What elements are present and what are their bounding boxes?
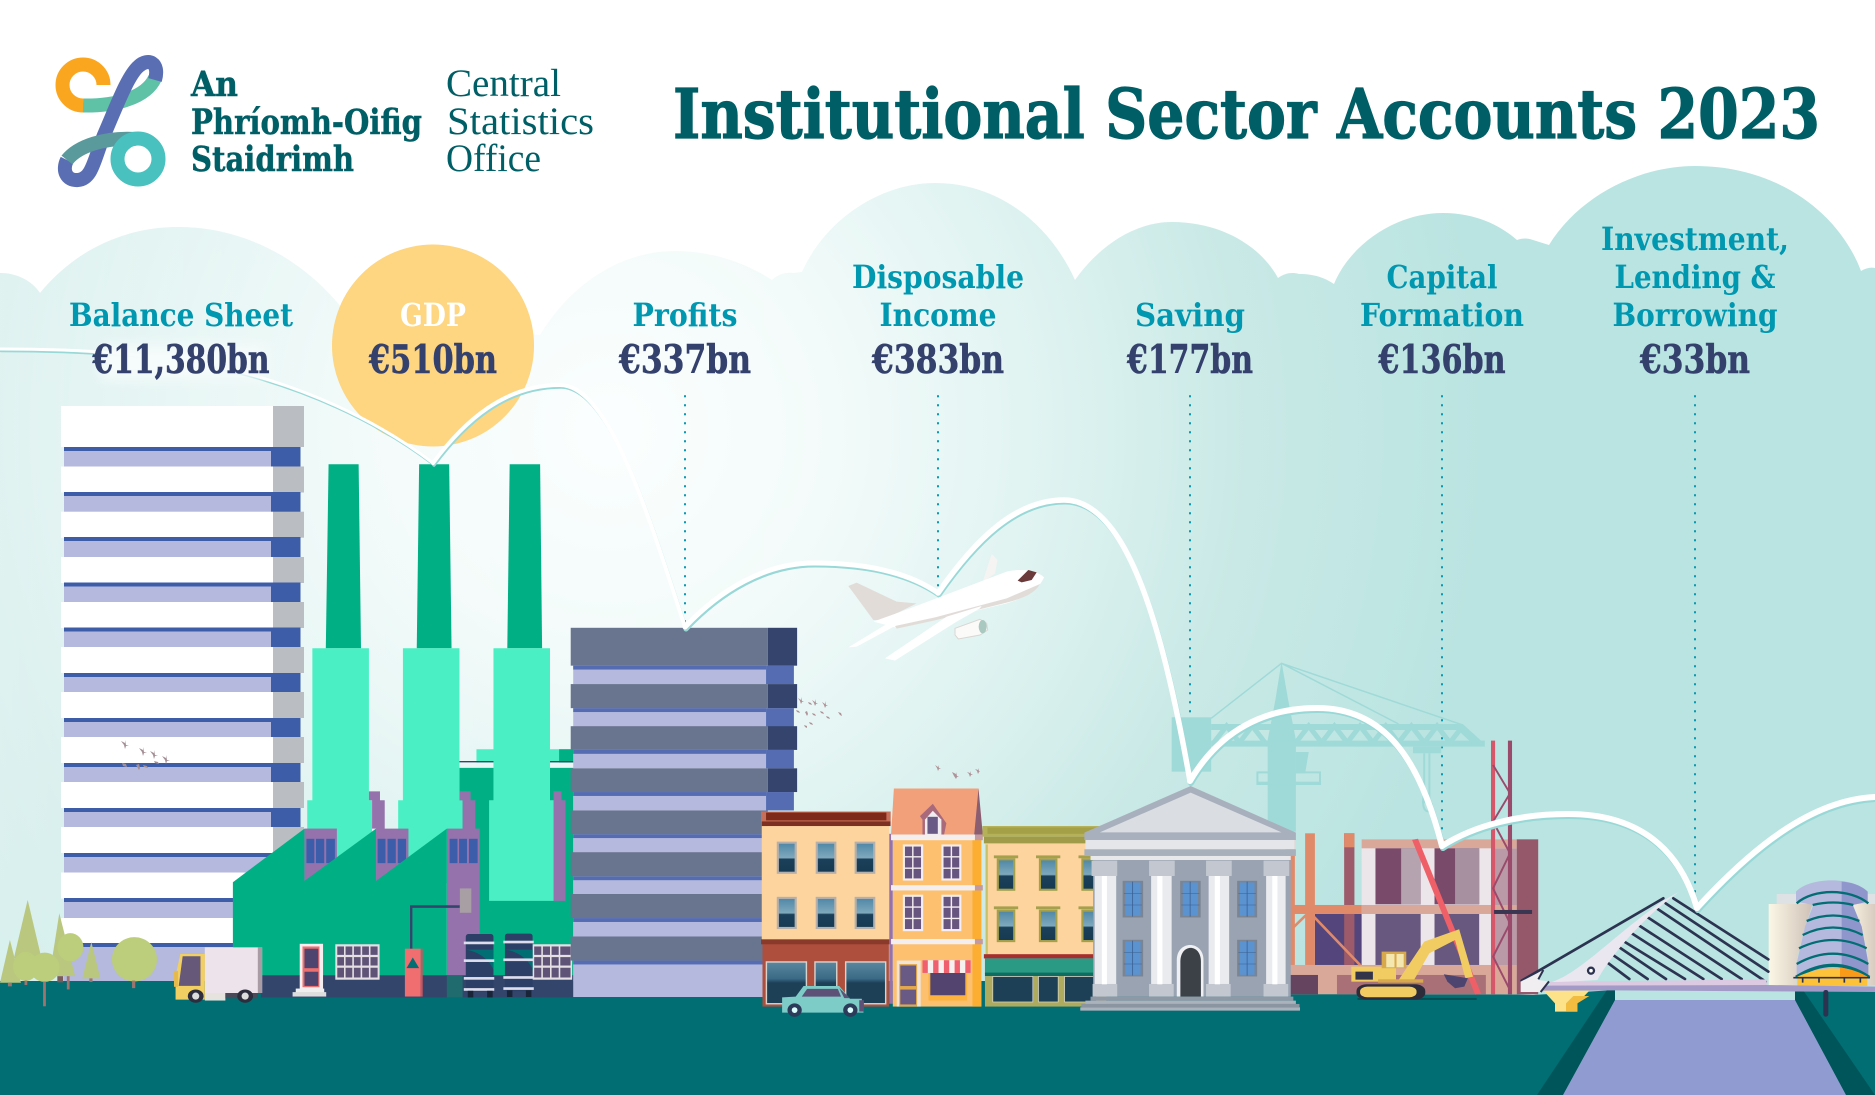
dotted leader lines xyxy=(685,396,1695,905)
pine trees xyxy=(0,900,100,983)
icon: excavator xyxy=(1351,929,1477,1000)
building: bank (Saving) xyxy=(1080,786,1300,1011)
convention centre xyxy=(1769,880,1875,986)
truck xyxy=(174,947,262,1003)
red tower and beam xyxy=(1415,741,1532,994)
birds over tower xyxy=(121,740,170,770)
curve shadows xyxy=(1,351,1875,910)
stat: GDP xyxy=(368,296,497,383)
logo text: English name: Central xyxy=(446,62,561,105)
stat: Capital Formation: €136bn xyxy=(1378,337,1506,383)
logo mark xyxy=(62,62,158,180)
stat: Investment, Lending & Borrowing: Investment, xyxy=(1601,220,1789,258)
stat: Balance Sheet: Balance Sheet xyxy=(69,296,293,334)
chimney 2 xyxy=(398,464,463,883)
bank door xyxy=(1177,945,1203,997)
round trees xyxy=(13,933,157,982)
river xyxy=(1537,990,1875,1095)
factory rear block xyxy=(459,749,573,981)
building: orange terrace house xyxy=(889,789,983,1007)
river banks xyxy=(1537,990,1875,1095)
house windows xyxy=(904,846,960,930)
car xyxy=(782,986,864,1017)
trees xyxy=(0,900,157,1006)
logo text: Irish name: Phríomh-Oifig xyxy=(191,102,422,143)
stat: Disposable Income: Disposable xyxy=(852,258,1024,296)
stat: Profits: Profits xyxy=(632,296,738,334)
logo text: Irish name xyxy=(190,64,422,180)
stat: GDP: GDP xyxy=(400,296,466,334)
sawtooth factory hall xyxy=(233,829,447,976)
stat: Saving: Saving xyxy=(1135,296,1245,334)
flow curves linking the sectors xyxy=(0,349,1875,910)
stat: Profits: €337bn xyxy=(618,337,751,383)
stat: GDP: €510bn xyxy=(368,337,497,383)
GDP highlight circle xyxy=(332,244,534,446)
factory door xyxy=(293,944,326,997)
logo text: English name: Statistics xyxy=(447,100,594,143)
dormer window xyxy=(920,804,946,836)
building: olive terrace house xyxy=(982,826,1106,1007)
stat: Saving xyxy=(1126,296,1253,383)
door xyxy=(897,961,921,1007)
pipe and vent box xyxy=(411,888,471,950)
stat: Investment, Lending & Borrowing: Borrowing xyxy=(1612,296,1778,334)
birds near office block xyxy=(796,697,980,779)
second grid window xyxy=(533,944,572,980)
logo text: Irish name: Staidrimh xyxy=(191,139,354,180)
building: red brick terrace house xyxy=(761,812,891,1007)
stat: Saving: €177bn xyxy=(1126,337,1253,383)
storage barrel 1 xyxy=(464,934,494,997)
building: Profits office block xyxy=(571,628,797,997)
building: construction site (Capital Formation) xyxy=(1286,741,1538,994)
building: tall white tower (Balance Sheet) xyxy=(61,406,304,981)
factory (GDP) xyxy=(233,464,573,997)
bridge pylon xyxy=(1550,892,1679,983)
logo text: English name: Office xyxy=(446,137,541,180)
bridge cables xyxy=(1522,898,1768,982)
logo: Central Statistics Office xyxy=(62,62,594,180)
logo text: English name xyxy=(446,62,594,180)
bridge pier xyxy=(1543,991,1589,1012)
stat: Capital Formation: Formation xyxy=(1360,296,1524,334)
storage barrel 2 xyxy=(503,934,534,997)
Samuel Beckett bridge xyxy=(1521,892,1875,1017)
stat: Capital Formation xyxy=(1360,258,1524,383)
stat: Investment, Lending & Borrowing xyxy=(1601,220,1789,383)
icon: aeroplane xyxy=(848,554,1044,661)
tree trunks xyxy=(8,976,135,1006)
logo text: Irish name: An xyxy=(190,64,238,105)
stat: Balance Sheet xyxy=(69,296,293,383)
stat: Disposable Income: Income xyxy=(880,296,996,334)
pink gate pillar xyxy=(405,949,423,997)
stat: Capital Formation: Capital xyxy=(1386,258,1498,296)
white bands xyxy=(891,835,975,944)
stat: Investment, Lending & Borrowing: €33bn xyxy=(1639,337,1750,383)
frame of building xyxy=(1286,839,1538,994)
factory windows xyxy=(306,839,478,863)
stat: Disposable Income xyxy=(852,258,1024,383)
crane silhouette xyxy=(1172,662,1485,832)
pediment xyxy=(1084,786,1296,860)
shop window and awning xyxy=(922,960,971,1001)
stat: Disposable Income: €383bn xyxy=(871,337,1004,383)
stat: Investment, Lending & Borrowing: Lending & xyxy=(1614,258,1776,296)
upper windows xyxy=(778,843,874,928)
bridge deck xyxy=(1521,970,1875,992)
olive house shop glass xyxy=(993,976,1097,1002)
bridge post xyxy=(1823,990,1828,1017)
chimney 1 xyxy=(307,464,372,883)
ground xyxy=(0,981,1875,1095)
purple stair towers xyxy=(304,791,480,976)
stat: Balance Sheet: €11,380bn xyxy=(92,337,269,383)
scaffold xyxy=(1286,833,1362,965)
shop windows xyxy=(766,962,886,1004)
background: cloud-shaped sky xyxy=(0,166,1875,1010)
soft white halo behind Balance Sheet value xyxy=(100,345,265,379)
chimney 3 xyxy=(489,464,565,901)
olive house windows xyxy=(998,859,1097,941)
curve highlights xyxy=(0,349,1875,908)
columns xyxy=(1092,861,1289,997)
stat: Profits xyxy=(618,296,751,383)
steps xyxy=(1080,997,1300,1011)
factory grid window xyxy=(335,944,380,980)
bank windows xyxy=(1124,882,1256,976)
